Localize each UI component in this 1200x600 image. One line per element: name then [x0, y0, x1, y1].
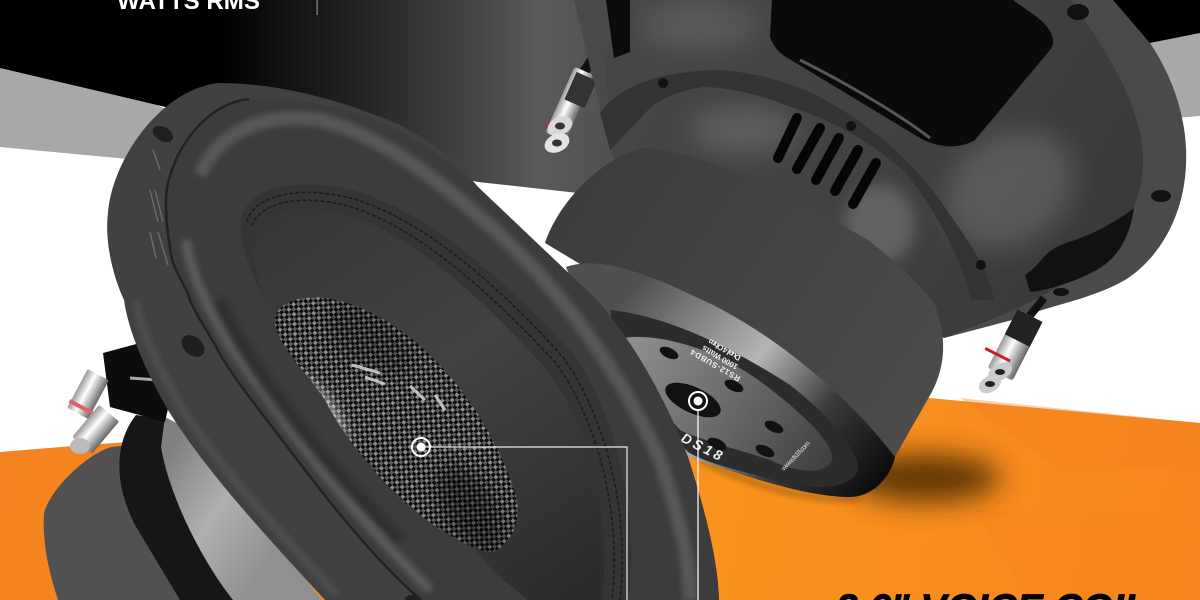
- front woofer: surround groove on frame side: [166, 99, 421, 600]
- front woofer: black ring: [119, 415, 250, 600]
- background: black to grey top banner: [0, 0, 1200, 193]
- front woofer: frame logo marks: [150, 150, 168, 265]
- rear woofer: basket body: [605, 0, 1143, 338]
- rear woofer: plate inner disc: [622, 337, 832, 471]
- rear woofer: plate logo: DS18: [679, 429, 725, 464]
- rear woofer: vent slots: [778, 118, 876, 204]
- rear woofer: outer frame: [574, 0, 1186, 338]
- front woofer: terminals: [67, 343, 170, 454]
- front woofer: outer frame: [107, 83, 719, 600]
- rear woofer: upper terminal: [541, 48, 600, 157]
- background: orange lower panel: [0, 398, 1200, 600]
- rear woofer: plate holes: [658, 344, 785, 460]
- rear woofer: left window: [606, 0, 630, 58]
- front woofer: rear magnet: [44, 440, 230, 600]
- front woofer: stitched ring: [241, 185, 631, 600]
- callout: plate marker and leader line: [689, 392, 707, 600]
- rear woofer: [541, 0, 1186, 497]
- rear woofer: magnet: [545, 148, 943, 490]
- front woofer: [44, 83, 719, 600]
- rear woofer: back plate: [610, 310, 858, 487]
- front woofer: surround: [166, 99, 719, 600]
- rear woofer: window lip highlight: [800, 60, 930, 138]
- rear woofer: plate model text: [689, 331, 751, 383]
- rear woofer: lower window: [1025, 208, 1134, 292]
- front woofer: basket strip: [161, 417, 322, 600]
- front woofer: frame mounting holes: [150, 122, 421, 600]
- rear woofer: large cooling window: [770, 0, 1053, 146]
- rear woofer: plate model text: 1000 Watts: [700, 343, 740, 371]
- front woofer: carbon dome: [274, 297, 518, 552]
- rear woofer: plate model text: RS12-SUBD4: [689, 347, 742, 383]
- callout: dome marker and leader line: [412, 438, 627, 600]
- top divider line: [316, 0, 318, 15]
- shadow under rear magnet: [700, 454, 1000, 502]
- rear woofer: screw holes: [658, 4, 1171, 296]
- dome logo marks: [352, 365, 445, 410]
- front woofer: stitching: [247, 192, 622, 600]
- front woofer: frame highlight edge: [136, 300, 337, 595]
- rear woofer: plate model text: Dual 4 Ohm: [707, 337, 742, 362]
- rear woofer: raised ring around magnet: [600, 70, 994, 300]
- rear woofer: lower terminal: [976, 298, 1044, 397]
- front woofer: cone: [254, 209, 604, 600]
- background: grey diagonal bands: [0, 33, 1200, 161]
- front woofer: surround ridge highlights: [186, 118, 690, 600]
- rear woofer: plate url text: www.ds18.com: [780, 440, 812, 473]
- rear woofer: magnet rim: [566, 263, 895, 497]
